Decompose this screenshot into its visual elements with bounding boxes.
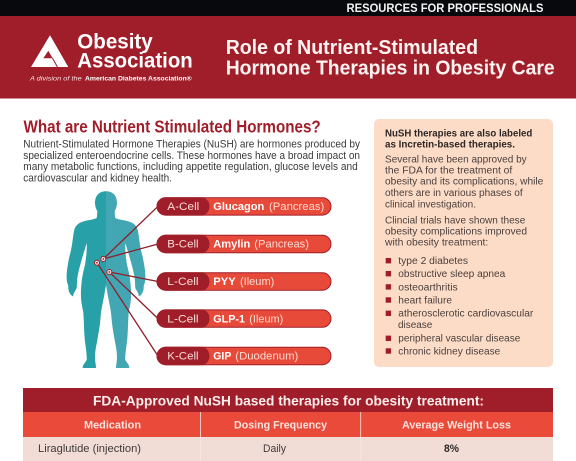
table row: Liraglutide: Liraglutide (injection) (38, 443, 141, 455)
icon: human body (67, 191, 145, 368)
complications list: atherosclerotic cardiovascular (398, 309, 534, 320)
body silhouette diagram (67, 191, 158, 368)
table row: Liraglutide (23, 437, 553, 461)
logo wordmark: Obesity (77, 30, 153, 53)
intro paragraph: many metabolic functions, including appetite regulation, glucose levels and (23, 161, 358, 173)
table: FDA-approved therapies (23, 388, 553, 461)
pill: A-Cell Glucagon (156, 197, 331, 216)
top bar: RESOURCES FOR PROFESSIONALS (346, 3, 544, 15)
logo tagline: American Diabetes Association® (85, 74, 192, 82)
callout paragraph: FDA approval: Several have been approved by (385, 154, 527, 165)
callout paragraph: clinical trials: obesity complications improved (385, 226, 527, 238)
pill: L-Cell PYY: PYY (213, 276, 236, 288)
intro paragraph (23, 138, 361, 184)
pill: B-Cell Amylin: Amylin (213, 239, 251, 251)
logo: Obesity Association (29, 30, 193, 82)
complications list: obstructive sleep apnea (398, 269, 506, 280)
pill: L-Cell PYY: (Ileum) (240, 276, 274, 288)
complications list: heart failure (398, 295, 452, 306)
pill: L-Cell GLP-1: GLP-1 (213, 313, 245, 325)
callout heading (385, 129, 532, 150)
pill: K-Cell GIP: (Duodenum) (235, 351, 298, 363)
pill: B-Cell Amylin: (Pancreas) (254, 239, 309, 251)
logo tagline: A division of the (29, 75, 82, 82)
top bar (0, 0, 576, 16)
intro paragraph: Nutrient-Stimulated Hormone Therapies (NuSH) are hormones produced by (23, 138, 361, 150)
title: Role of Nutrient-Stimulated (226, 37, 478, 59)
connector lines (97, 206, 158, 356)
complications list: disease (398, 320, 433, 331)
title: Hormone Therapies in Obesity Care (226, 57, 555, 79)
pill: B-Cell Amylin (156, 235, 331, 253)
pill: L-Cell PYY (156, 272, 331, 291)
callout paragraph: FDA approval: obesity and its complications, while (385, 177, 544, 188)
complications list (386, 256, 534, 357)
table row: Liraglutide: Daily (263, 443, 286, 455)
pill: A-Cell Glucagon: (Pancreas) (269, 201, 324, 213)
panel: incretin-based therapies callout (374, 119, 553, 367)
marker dots (94, 256, 112, 274)
table title (23, 388, 553, 412)
table header row (23, 412, 553, 437)
callout heading: NuSH therapies are also labeled (385, 129, 532, 140)
callout paragraph: FDA approval: others are in various phases of (385, 188, 523, 199)
icon: logo triangle (31, 35, 68, 67)
pill: K-Cell GIP (157, 347, 331, 365)
complications list: osteoarthritis (398, 282, 458, 293)
callout paragraph: FDA approval (385, 154, 544, 210)
pill: B-Cell Amylin: B-Cell (167, 239, 199, 251)
pill: A-Cell Glucagon: Glucagon (213, 201, 265, 213)
heading: What are Nutrient Stimulated Hormones?: What are Nutrient Stimulated Hormones? (24, 117, 321, 137)
table header row: Medication (84, 419, 141, 431)
callout paragraph: FDA approval: clinical investigation. (385, 199, 476, 210)
pill: K-Cell GIP: GIP (213, 351, 231, 363)
header banner (0, 16, 576, 98)
pill: L-Cell GLP-1: L-Cell (167, 313, 199, 325)
callout paragraph: clinical trials: Clincial trials have shown these (385, 215, 526, 226)
table title: FDA-Approved NuSH based therapies for obesity treatment: (93, 392, 484, 408)
table header row: Average Weight Loss (402, 419, 511, 431)
callout paragraph: clinical trials (384, 215, 527, 249)
table header row: Dosing Frequency (234, 419, 328, 431)
complications list: type 2 diabetes (398, 256, 468, 267)
callout paragraph: FDA approval: the FDA for the treatment of (385, 166, 513, 176)
intro paragraph: specialized enteroendocrine cells. These hormones have a broad impact on (23, 150, 360, 162)
complications list: peripheral vascular disease (398, 334, 521, 345)
logo wordmark: Association (77, 50, 193, 73)
pill: L-Cell GLP-1: (Ileum) (249, 313, 283, 325)
intro paragraph: cardiovascular and kidney health. (23, 172, 172, 184)
callout paragraph: clinical trials: with obesity treatment: (384, 238, 488, 249)
logo tagline (29, 74, 192, 82)
callout heading: as Incretin-based therapies. (385, 139, 515, 150)
table row: Liraglutide: 8% (444, 443, 459, 455)
pill: L-Cell PYY: L-Cell (167, 276, 199, 288)
pill: K-Cell GIP: K-Cell (167, 351, 199, 363)
pill: L-Cell GLP-1 (156, 309, 331, 328)
complications list: chronic kidney disease (398, 346, 501, 357)
title (226, 37, 555, 79)
logo wordmark (77, 30, 193, 73)
pill: A-Cell Glucagon: A-Cell (167, 201, 199, 213)
